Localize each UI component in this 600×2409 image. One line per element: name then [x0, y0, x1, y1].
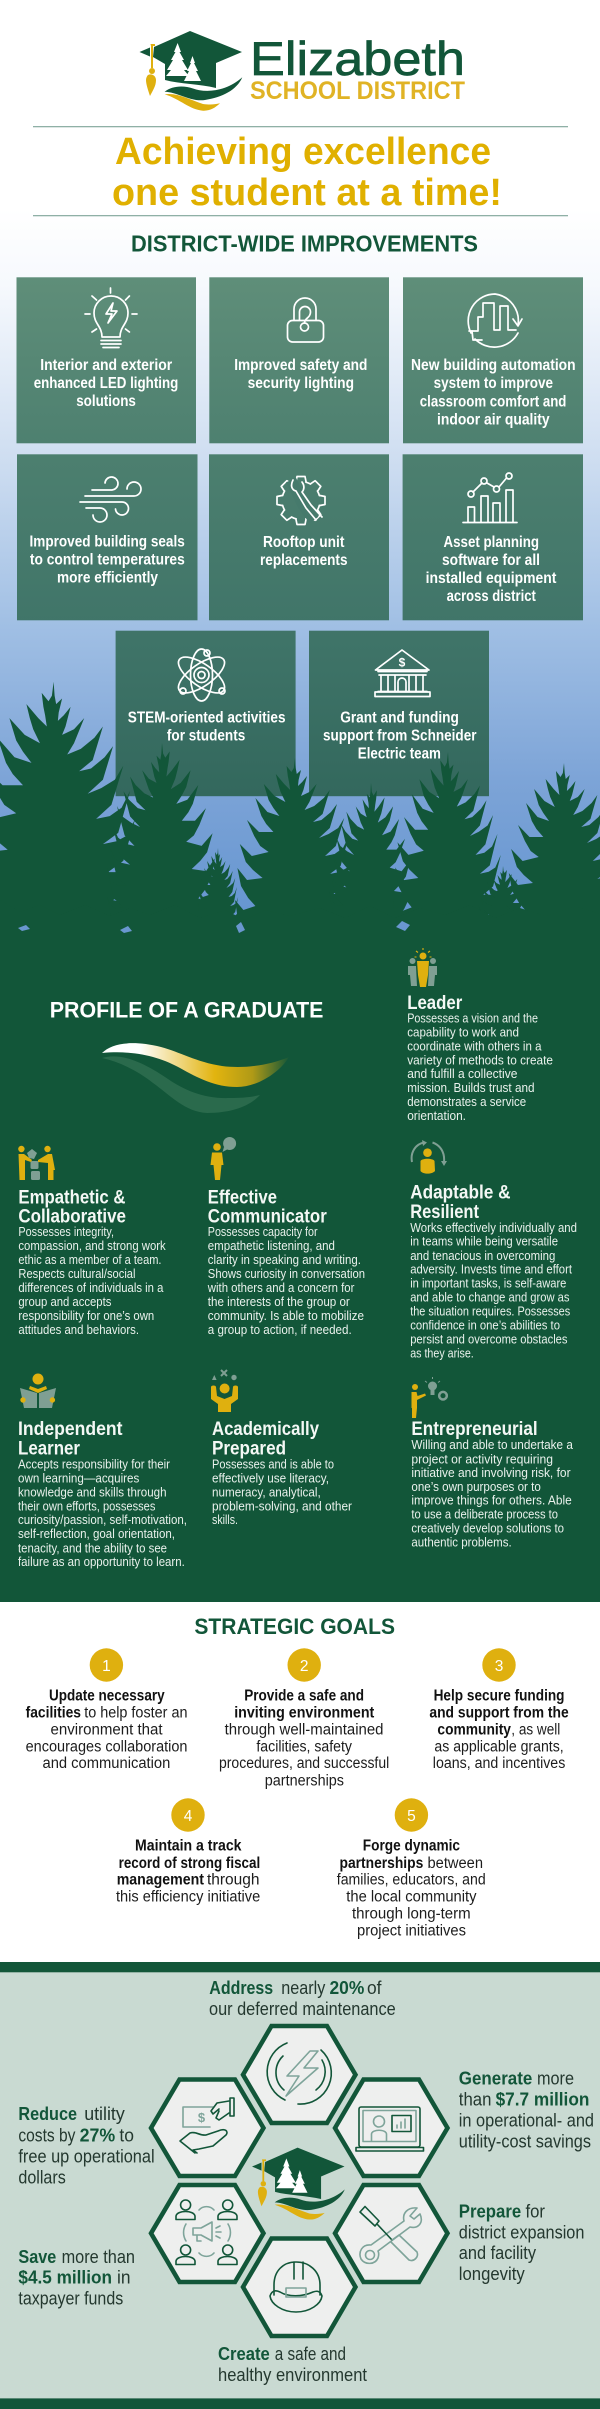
heading	[212, 1418, 319, 1459]
benefit text: generate	[459, 2069, 594, 2151]
heading	[18, 1186, 126, 1228]
description: variety of methods to create	[407, 1052, 553, 1067]
icon: bank	[375, 650, 430, 696]
goal text: environment that	[50, 1721, 163, 1738]
goal text: partnerships	[340, 1855, 423, 1872]
heading: strategic goals: STRATEGIC GOALS	[194, 1614, 395, 1639]
card text	[34, 357, 178, 410]
card text: Interior and exterior	[40, 357, 172, 374]
description: the situation requires. Possesses	[410, 1304, 571, 1319]
icon: two people stacking blocks	[18, 1146, 55, 1180]
benefit text: create: healthy environment	[218, 2365, 367, 2385]
heading: Adaptable &	[410, 1182, 510, 1204]
description: Possesses capacity for	[208, 1224, 318, 1239]
description: capability to work and	[407, 1025, 519, 1040]
goal 3	[429, 1648, 569, 1772]
goal text: between	[428, 1855, 483, 1872]
icon: lightning bolt	[267, 2043, 331, 2104]
heading: Academically	[212, 1418, 319, 1440]
description: in important tasks, is self-aware	[410, 1276, 566, 1291]
benefit text: prepare: and facility	[459, 2243, 536, 2263]
goal text	[26, 1688, 187, 1772]
description: tenacity, and the ability to see	[18, 1540, 167, 1555]
heading: Effective	[208, 1186, 277, 1208]
goal text: to help foster an	[84, 1704, 188, 1721]
description: their own efforts, possesses	[18, 1498, 156, 1513]
goal text: management	[117, 1872, 204, 1889]
description: Accepts responsibility for their	[18, 1456, 171, 1471]
benefit text: prepare: for	[526, 2202, 545, 2222]
benefit text: generate: $7.7 million	[496, 2090, 589, 2110]
goal text: Forge dynamic	[363, 1838, 460, 1855]
logo	[140, 31, 465, 111]
heading: Empathetic &	[18, 1186, 125, 1208]
number badge 2	[288, 1648, 321, 1682]
benefit text: address: Address	[209, 1978, 273, 1998]
goal text: through long-term	[352, 1905, 471, 1922]
heading: Communicator	[208, 1206, 327, 1228]
benefit text: prepare: longevity	[459, 2264, 525, 2284]
description: knowledge and skills through	[18, 1484, 166, 1499]
goal text	[116, 1838, 260, 1906]
logo: SCHOOL DISTRICT	[250, 77, 465, 105]
benefit text: save: more than	[62, 2247, 135, 2267]
benefit text: generate: than	[459, 2090, 491, 2110]
card text: enhanced LED lighting	[34, 375, 178, 392]
heading: Entrepreneurial	[411, 1418, 538, 1440]
description: a group to action, if needed.	[208, 1322, 352, 1337]
description: Respects cultural/social	[18, 1266, 136, 1281]
heading: Independent	[18, 1418, 123, 1440]
description	[212, 1456, 353, 1527]
card text	[128, 710, 286, 744]
description: Possesses a vision and the	[407, 1011, 538, 1026]
goal 4	[116, 1798, 260, 1906]
benefit text: reduce: utility	[84, 2104, 125, 2124]
goal text: the local community	[346, 1889, 477, 1906]
benefit text: address	[209, 1978, 396, 2019]
goal text	[219, 1688, 389, 1789]
description	[18, 1456, 187, 1569]
panel: building seals	[17, 454, 198, 620]
description: coordinate with others in a	[407, 1038, 542, 1053]
benefit text: prepare	[459, 2202, 584, 2284]
heading	[18, 1418, 123, 1459]
panel: strategic goals	[26, 1614, 569, 1940]
goal text: inviting environment	[234, 1704, 374, 1721]
description: improve things for others. Able	[411, 1493, 572, 1508]
number badge 5: 5	[407, 1808, 416, 1825]
benefit text: generate: more	[537, 2069, 574, 2089]
description: and tenacious in overcoming	[410, 1248, 555, 1263]
heading: district-wide improvements: DISTRICT-WIDE IMPROVEMENTS	[131, 230, 478, 256]
panel: building automation	[403, 277, 583, 443]
description: Possesses and is able to	[212, 1456, 334, 1471]
description: skills.	[212, 1512, 238, 1527]
description: one’s own purposes or to	[411, 1479, 541, 1494]
card text: classroom comfort and	[420, 394, 566, 410]
benefit text: address: nearly	[281, 1978, 325, 1998]
description: group and accepts	[18, 1294, 112, 1309]
description: curiosity/passion, self-motivation,	[18, 1512, 187, 1527]
description: attitudes and behaviors.	[18, 1322, 139, 1337]
icon: leader	[408, 948, 437, 987]
number badge 1	[90, 1648, 123, 1682]
benefit text: save	[18, 2247, 135, 2309]
benefit text: address: 20%	[330, 1978, 364, 1998]
goal text: facilities	[26, 1704, 81, 1721]
goal text: partnerships	[265, 1772, 344, 1789]
card text: system to improve	[434, 375, 553, 392]
panel: asset planning	[403, 454, 583, 620]
description: problem-solving, and other	[212, 1498, 353, 1513]
description: compassion, and strong work	[18, 1238, 166, 1253]
description: demonstrates a service	[407, 1094, 526, 1109]
description	[411, 1437, 574, 1550]
goal text	[337, 1838, 486, 1940]
icon: person with raised arms and symbols	[211, 1370, 238, 1412]
profile: adaptable and resilient	[410, 1140, 577, 1361]
benefit text: save: in	[117, 2268, 130, 2288]
icon: people and megaphone	[176, 2200, 237, 2264]
goal text: project initiatives	[357, 1923, 466, 1940]
center logo	[252, 2148, 345, 2220]
description: adversity. Invests time and effort	[410, 1261, 572, 1276]
goal text: procedures, and successful	[219, 1755, 389, 1772]
icon: hand passing money: $	[198, 2110, 206, 2125]
description: Possesses integrity,	[18, 1224, 114, 1239]
description: project or activity requiring	[411, 1451, 553, 1466]
description: responsibility for one’s own	[18, 1308, 154, 1323]
profile: independent learner	[18, 1374, 187, 1569]
description: numeracy, analytical,	[212, 1484, 321, 1499]
sky gradient background	[0, 0, 600, 960]
hexagon: community	[151, 2185, 264, 2282]
benefit text: reduce: dollars	[18, 2167, 66, 2187]
heading: Learner	[18, 1437, 80, 1459]
description	[207, 1224, 365, 1337]
goal text: Update necessary	[49, 1688, 165, 1705]
goal text: Help secure funding	[434, 1688, 564, 1705]
heading: Prepared	[212, 1437, 286, 1459]
benefit text: generate: Generate	[459, 2069, 532, 2089]
card text: solutions	[76, 393, 136, 410]
description: initiative and involving risk, for	[411, 1465, 571, 1480]
card text: software for all	[442, 552, 540, 569]
goal text: through	[207, 1872, 260, 1889]
benefit text: prepare: district expansion	[459, 2223, 584, 2243]
icon: person reading book	[20, 1374, 56, 1408]
benefit text: reduce: Reduce	[18, 2104, 77, 2124]
heading	[208, 1186, 327, 1228]
title	[112, 131, 502, 214]
description: Willing and able to undertake a	[411, 1437, 574, 1452]
card text: Electric team	[358, 746, 441, 762]
benefit text: create: a safe and	[275, 2344, 346, 2364]
description: ethic as a member of a team.	[18, 1252, 162, 1267]
description: Works effectively individually and	[410, 1220, 577, 1235]
card text	[234, 357, 367, 392]
goal 2	[219, 1648, 389, 1789]
icon: person with speech bubble	[210, 1137, 236, 1180]
description	[18, 1224, 166, 1337]
goal text: encourages collaboration	[26, 1738, 187, 1755]
icon: bank: $	[399, 656, 406, 670]
goal text: and communication	[42, 1755, 170, 1772]
description: self-reflection, goal orientation,	[18, 1526, 175, 1541]
icon: hard hat	[270, 2262, 322, 2312]
profile: empathetic and collaborative	[18, 1146, 166, 1337]
description: to use a deliberate process to	[411, 1507, 558, 1522]
description: Shows curiosity in conversation	[208, 1266, 365, 1281]
card text	[411, 357, 576, 428]
description: effectively use literacy,	[212, 1471, 329, 1486]
profile: entrepreneurial	[411, 1377, 574, 1550]
heading: Resilient	[410, 1201, 479, 1223]
goal text: Maintain a track	[135, 1838, 242, 1855]
panel: benefits	[0, 1962, 600, 2409]
card text: Grant and funding	[340, 710, 459, 726]
goal text: through well-maintained	[225, 1721, 384, 1738]
heading	[410, 1182, 510, 1223]
hexagon: laptop	[335, 2080, 448, 2176]
description: with others and a concern for	[207, 1280, 355, 1295]
card text: Rooftop unit	[263, 534, 345, 551]
icon: person with cycle arrows	[412, 1140, 447, 1174]
description: as they arise.	[410, 1346, 474, 1361]
panel: grant and funding	[309, 631, 489, 796]
panel: profile of a graduate	[0, 935, 600, 1602]
goal text: loans, and incentives	[433, 1755, 566, 1772]
benefit text: reduce	[18, 2104, 155, 2187]
description: orientation.	[407, 1108, 466, 1123]
icon: atom	[173, 649, 230, 701]
card text: security lighting	[248, 375, 354, 392]
benefit text: reduce: costs by	[18, 2125, 75, 2145]
icon: presenter on laptop	[356, 2107, 424, 2151]
benefit text: reduce: free up operational	[18, 2146, 155, 2166]
card text	[426, 534, 557, 605]
icon: skyline in cycle arrows	[468, 294, 522, 347]
goal text: community	[437, 1721, 511, 1738]
goal text: as applicable grants,	[434, 1738, 564, 1755]
profile: effective communicator	[207, 1137, 365, 1337]
icon: person pointing at bulb and gear	[412, 1377, 447, 1418]
description: authentic problems.	[411, 1535, 512, 1550]
goal text: Provide a safe and	[244, 1688, 364, 1705]
description: and fulfill a collective	[407, 1066, 517, 1081]
number badge 1: 1	[102, 1658, 111, 1675]
benefit text: create	[218, 2344, 367, 2385]
description: community. Is able to mobilize	[208, 1308, 364, 1323]
card text: replacements	[260, 552, 348, 569]
card text: Improved building seals	[30, 534, 185, 550]
benefit text: save: taxpayer funds	[18, 2289, 123, 2309]
card text: to control temperatures	[30, 552, 185, 568]
goal 1	[26, 1648, 187, 1772]
goal text: families, educators, and	[337, 1872, 486, 1889]
icon: light bulb	[85, 288, 137, 348]
goal text: , as well	[511, 1721, 560, 1738]
icon: open lock	[288, 298, 324, 342]
card text: Improved safety and	[234, 357, 367, 374]
card text: STEM-oriented activities	[128, 710, 286, 726]
goal text: record of strong fiscal	[119, 1855, 260, 1872]
card text	[260, 534, 348, 569]
benefit text: save: $4.5 million	[18, 2268, 112, 2288]
description: the interests of the group or	[208, 1294, 350, 1309]
description: own learning—acquires	[18, 1471, 140, 1486]
description: mission. Builds trust and	[407, 1080, 535, 1095]
card text: across district	[447, 588, 536, 605]
hexagon: tools	[335, 2185, 448, 2282]
description	[407, 1011, 553, 1123]
profile: academically prepared	[211, 1370, 353, 1527]
benefit text: prepare: Prepare	[459, 2202, 521, 2222]
icon: wind	[80, 477, 141, 522]
description: clarity in speaking and writing.	[208, 1252, 361, 1267]
panel: rooftop units	[209, 454, 389, 620]
benefit text: save: Save	[18, 2247, 56, 2267]
goal 5	[337, 1798, 486, 1940]
icon: screwdriver and wrench	[360, 2206, 421, 2263]
number badge 2: 2	[300, 1658, 309, 1675]
description: and able to change and grow as	[410, 1290, 570, 1305]
card text	[323, 710, 476, 762]
goal text: facilities, safety	[256, 1738, 352, 1755]
benefit text: create: Create	[218, 2344, 270, 2364]
description	[410, 1220, 577, 1361]
icon: gear and wrench	[277, 476, 325, 524]
card text	[30, 534, 185, 586]
goal text: this efficiency initiative	[116, 1889, 260, 1906]
description: in teams while being versatile	[410, 1234, 558, 1249]
logo: Elizabeth	[250, 32, 465, 85]
panel: STEM activities	[116, 631, 296, 796]
profile: leader	[407, 948, 553, 1123]
description: empathetic listening, and	[208, 1238, 335, 1253]
description: creatively develop solutions to	[411, 1520, 564, 1535]
benefit text: address: our deferred maintenance	[209, 1999, 396, 2019]
decorative swoosh	[102, 1043, 289, 1113]
goal text: and support from the	[429, 1704, 569, 1721]
number badge 4	[171, 1798, 205, 1832]
heading: profile of a graduate: PROFILE OF A GRADUATE	[50, 998, 323, 1022]
hexagon: money	[151, 2080, 264, 2176]
card text: Asset planning	[444, 534, 539, 551]
goal text	[429, 1688, 569, 1772]
card text: for students	[167, 728, 245, 744]
card text: more efficiently	[57, 570, 158, 586]
heading: Collaborative	[18, 1206, 126, 1228]
number badge 3: 3	[495, 1658, 503, 1675]
hexagon: energy	[243, 2026, 356, 2123]
hexagon: hard hat	[243, 2238, 356, 2336]
panel: LED lighting	[16, 277, 196, 443]
title: one student at a time!	[112, 172, 502, 214]
description: differences of individuals in a	[18, 1280, 164, 1295]
benefit text: reduce: 27%	[80, 2125, 115, 2145]
card text: support from Schneider	[323, 728, 476, 744]
number badge 4: 4	[184, 1808, 193, 1825]
panel: safety lighting	[209, 277, 389, 443]
number badge 5	[395, 1798, 428, 1832]
heading: Leader	[407, 992, 463, 1014]
card text: installed equipment	[426, 570, 557, 587]
description: persist and overcome obstacles	[410, 1331, 568, 1346]
description: failure as an opportunity to learn.	[18, 1554, 185, 1569]
card text: New building automation	[411, 357, 576, 374]
tree line silhouette	[0, 682, 600, 966]
title: Achieving excellence	[115, 131, 491, 173]
card text: indoor air quality	[437, 412, 550, 428]
benefit text: address: of	[367, 1978, 382, 1998]
description: confidence in one’s abilities to	[410, 1318, 560, 1333]
benefit text: reduce: to	[119, 2125, 134, 2145]
icon: chart	[463, 473, 517, 522]
